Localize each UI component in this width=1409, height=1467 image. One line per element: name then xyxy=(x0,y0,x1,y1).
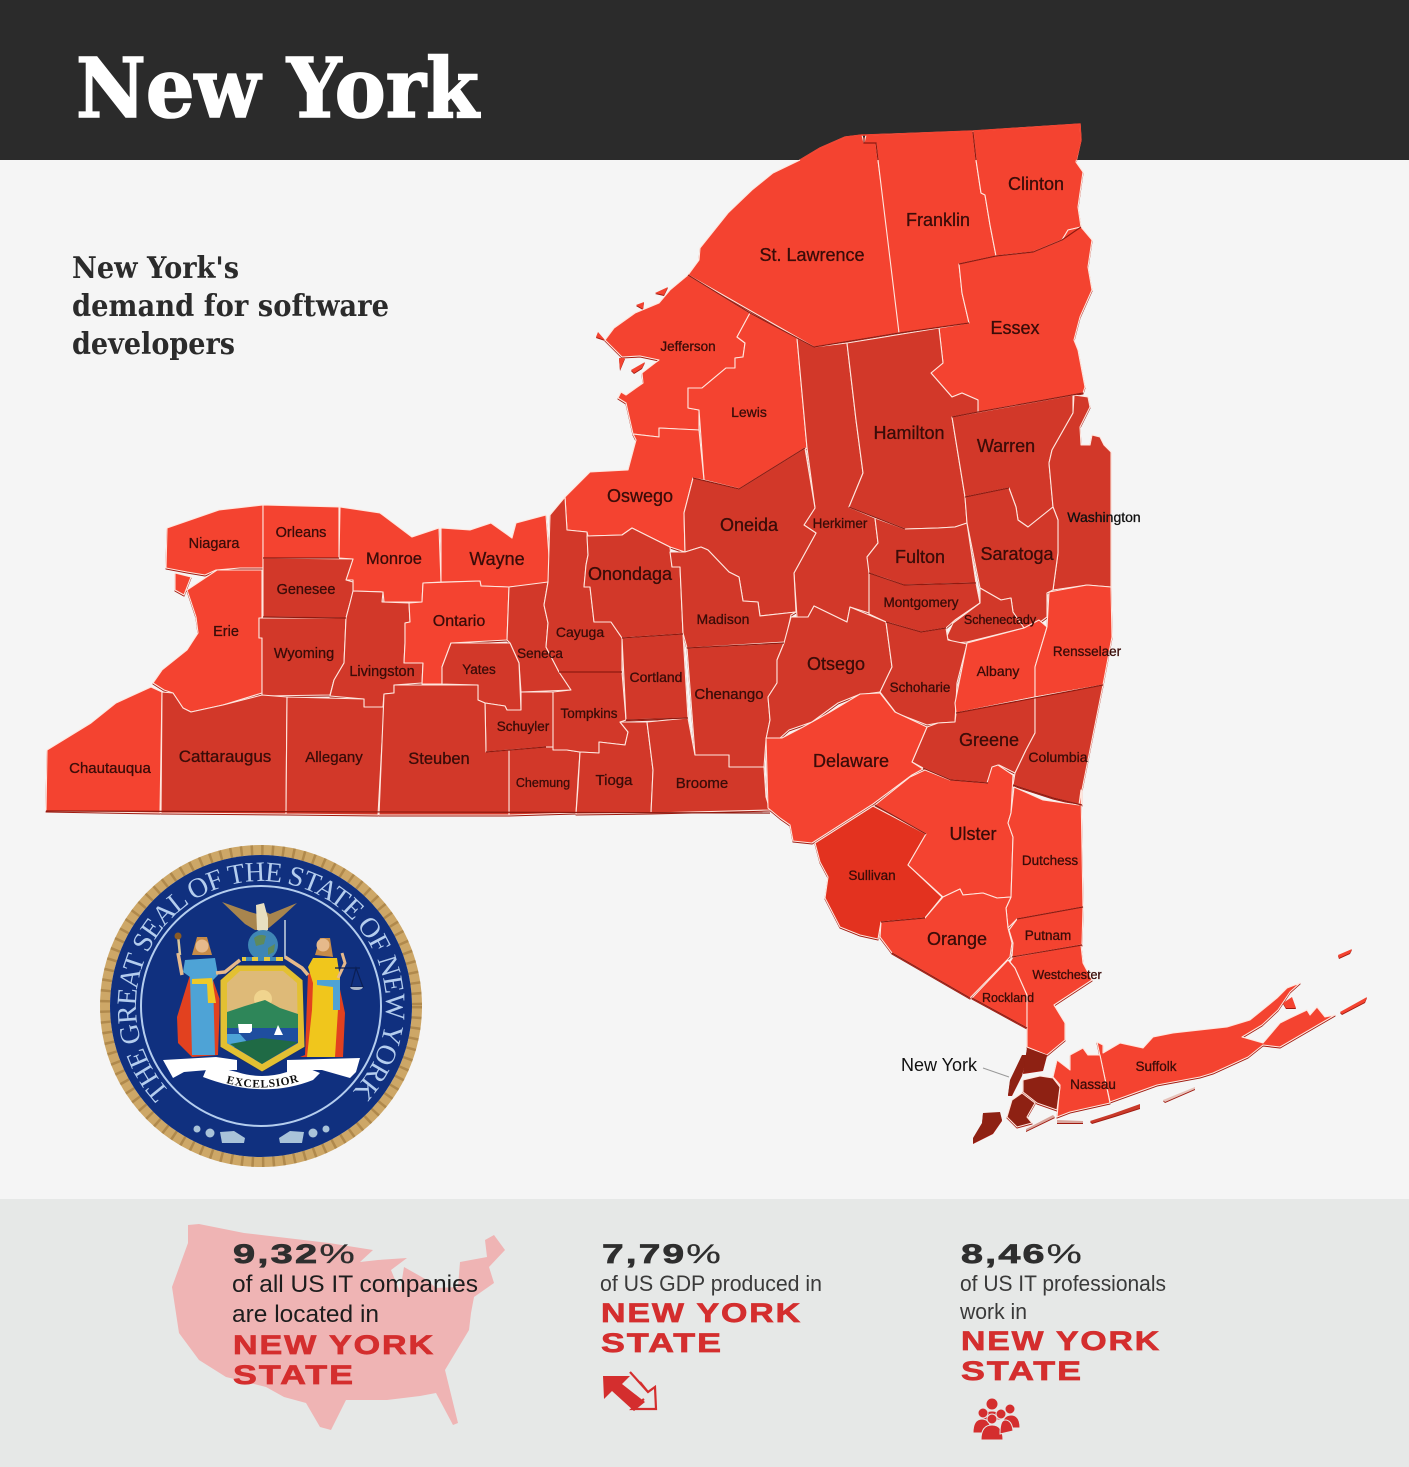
county: Washington xyxy=(1049,395,1111,590)
county: Chemung xyxy=(509,747,580,815)
county labels: Wayne xyxy=(469,549,525,569)
stat 2: text: 7,79 % xyxy=(602,1239,723,1269)
county: Livingston xyxy=(330,591,423,707)
county labels: Hamilton xyxy=(873,423,945,443)
footer band xyxy=(0,1199,1409,1467)
county: Bronx xyxy=(1023,1048,1047,1073)
county: Seneca xyxy=(507,582,571,692)
seal eagle xyxy=(222,902,297,932)
county labels: Otsego xyxy=(807,654,865,674)
county: Onondaga xyxy=(584,528,683,638)
county: Tioga xyxy=(576,722,653,814)
county labels: Seneca xyxy=(517,646,563,661)
county labels: Oswego xyxy=(607,486,673,506)
county: Albany xyxy=(955,620,1047,713)
county: Niagara xyxy=(166,505,263,575)
header band xyxy=(0,0,1409,160)
county labels: Chautauqua xyxy=(69,760,152,777)
county labels: Rockland xyxy=(982,991,1034,1005)
seal shield xyxy=(220,965,305,1072)
county labels: Ulster xyxy=(949,824,997,844)
county labels: Fulton xyxy=(895,547,945,567)
county labels: Erie xyxy=(213,624,239,640)
county: Dutchess xyxy=(1006,787,1083,928)
stat 2: text: STATE xyxy=(601,1328,723,1358)
county labels: Greene xyxy=(959,730,1019,750)
county: Erie xyxy=(153,570,262,712)
stat 1: text: are located in xyxy=(232,1301,379,1328)
county: Essex xyxy=(931,227,1092,412)
county: Putnam xyxy=(1009,907,1083,957)
title: New York xyxy=(76,41,481,137)
icon: two-way arrows xyxy=(603,1372,656,1411)
county: Wyoming xyxy=(259,618,346,696)
county labels: Herkimer xyxy=(813,516,868,531)
county labels: Schenectady xyxy=(964,613,1037,627)
county: Ontario xyxy=(404,581,509,684)
stat 1: US map silhouette xyxy=(172,1224,505,1430)
county: Herkimer xyxy=(794,338,878,622)
county labels: Schuyler xyxy=(497,719,550,734)
seal figure: Justice xyxy=(285,938,363,1057)
icon: group of people xyxy=(973,1398,1020,1440)
county: Cayuga xyxy=(544,497,622,673)
county: Madison xyxy=(670,547,796,648)
stat 1: text: NEW YORK xyxy=(233,1330,435,1360)
county: Warren xyxy=(952,395,1073,527)
county: Queens xyxy=(1023,1076,1060,1110)
seal blue disc xyxy=(110,855,412,1157)
county labels: Broome xyxy=(676,775,728,792)
county labels: Delaware xyxy=(813,751,889,771)
county labels: Steuben xyxy=(408,750,470,768)
stat 3: text: work in xyxy=(959,1299,1027,1324)
county labels: Jefferson xyxy=(660,339,716,354)
county labels: Ontario xyxy=(433,613,485,630)
county labels: Montgomery xyxy=(883,595,959,610)
county labels: Tompkins xyxy=(560,706,618,721)
county labels xyxy=(69,174,1177,1092)
stat 3: text: NEW YORK xyxy=(961,1326,1161,1356)
county labels: Dutchess xyxy=(1022,853,1078,868)
county labels: Genesee xyxy=(277,582,335,598)
county labels: Franklin xyxy=(906,210,970,230)
stat 1: text: STATE xyxy=(233,1360,355,1390)
county: Oneida xyxy=(684,448,816,616)
county labels: Columbia xyxy=(1028,749,1088,765)
county: Staten Island xyxy=(973,1112,1002,1143)
county: Grand Island xyxy=(175,573,191,595)
county: Otsego xyxy=(766,606,892,739)
county labels: Westchester xyxy=(1032,968,1102,982)
county labels: Cattaraugus xyxy=(179,747,271,766)
stat 1: text: 9,32 % xyxy=(233,1239,357,1269)
New York City callout xyxy=(901,1055,1009,1077)
county: Franklin xyxy=(864,131,996,333)
county: Greene xyxy=(912,697,1035,783)
county: Broome xyxy=(647,718,770,813)
county labels: Onondaga xyxy=(588,564,673,584)
county labels: Allegany xyxy=(305,749,363,766)
county labels: Washington xyxy=(1067,509,1141,525)
county: Columbia xyxy=(1013,685,1103,805)
county labels: Lewis xyxy=(731,404,767,420)
county labels: Nassau xyxy=(1070,1077,1116,1092)
county: Steuben xyxy=(379,685,509,815)
county: Wayne xyxy=(441,515,550,587)
Long Island east tip and barrier islands xyxy=(596,287,1367,1131)
county labels: Livingston xyxy=(349,664,415,680)
county labels: Orleans xyxy=(276,525,326,541)
county: Ulster xyxy=(875,765,1013,898)
county: Monroe xyxy=(339,507,441,602)
county: Fulton xyxy=(867,518,976,585)
county labels: Cortland xyxy=(630,669,682,685)
stat 3: text: STATE xyxy=(961,1356,1083,1386)
subheading: New York's xyxy=(72,251,239,286)
county labels: St. Lawrence xyxy=(759,245,865,265)
county labels: Suffolk xyxy=(1135,1059,1177,1074)
subheading: demand for software xyxy=(72,289,389,324)
county labels: Tioga xyxy=(596,772,633,789)
county: Rensselaer xyxy=(1035,585,1112,697)
county: Lewis xyxy=(688,313,807,489)
county: Manhattan xyxy=(1008,1055,1027,1095)
county: Nassau xyxy=(1053,1048,1110,1117)
county: Clinton xyxy=(973,124,1083,256)
county: Delaware xyxy=(766,693,927,843)
county labels: Madison xyxy=(697,611,749,627)
county labels: Sullivan xyxy=(848,868,896,883)
seal figure: Liberty xyxy=(174,932,240,1057)
stat 1: text xyxy=(232,1239,478,1390)
county: Cattaraugus xyxy=(161,692,287,814)
county: Montgomery xyxy=(869,573,980,632)
county: Brooklyn xyxy=(1007,1093,1035,1127)
stat 2: text: NEW YORK xyxy=(601,1298,802,1328)
map of New York counties xyxy=(46,124,1367,1143)
county: Oswego xyxy=(565,428,704,552)
county: Orange xyxy=(880,889,1012,998)
county: Tompkins xyxy=(553,672,628,753)
county: Chenango xyxy=(687,643,784,767)
stat 3: text xyxy=(959,1239,1166,1386)
county: Allegany xyxy=(286,697,384,815)
county labels: Clinton xyxy=(1008,174,1064,194)
dark county boundary lines xyxy=(46,227,1103,1028)
seal globe xyxy=(242,920,285,961)
county labels: Putnam xyxy=(1025,928,1071,943)
county: Cortland xyxy=(622,634,688,720)
county: Jefferson xyxy=(605,275,750,437)
stat 2: text xyxy=(600,1239,822,1358)
county: Schenectady xyxy=(946,588,1024,643)
county labels: Schoharie xyxy=(890,680,950,695)
subheading xyxy=(72,251,389,362)
county labels: Rensselaer xyxy=(1053,644,1122,659)
seal motto: EXCELSIOR xyxy=(226,1075,299,1088)
county: Sullivan xyxy=(815,806,942,939)
stat 3: text: of US IT professionals xyxy=(960,1271,1166,1296)
stat 1: text: of all US IT companies xyxy=(232,1271,478,1298)
county: Westchester xyxy=(1010,945,1092,1055)
county labels: Oneida xyxy=(720,515,779,535)
county: Rockland xyxy=(972,960,1027,1028)
county: Saratoga xyxy=(965,488,1058,628)
county labels: Niagara xyxy=(189,536,240,552)
county: St. Lawrence xyxy=(688,135,899,347)
county labels: Orange xyxy=(927,929,987,949)
county: Hamilton xyxy=(847,328,978,529)
subheading: developers xyxy=(72,327,235,362)
seal ring text: THE GREAT SEAL OF THE STATE OF NEW YORK xyxy=(118,862,404,1104)
county labels: Albany xyxy=(977,663,1019,679)
county labels: Chemung xyxy=(516,776,570,790)
county: Suffolk xyxy=(1097,983,1335,1102)
county: Schoharie xyxy=(880,622,967,725)
county: Orleans xyxy=(263,505,339,558)
county: Chautauqua xyxy=(46,687,162,813)
county labels: Chenango xyxy=(694,686,764,703)
seal bottom shells xyxy=(194,1126,330,1143)
seal rope ring xyxy=(105,850,417,1162)
north edge over header xyxy=(800,124,1081,160)
county labels: Monroe xyxy=(366,550,422,568)
county labels: Yates xyxy=(462,662,496,677)
state seal xyxy=(100,845,422,1167)
stat 3: text: 8,46 % xyxy=(961,1239,1084,1269)
stat 2: text: of US GDP produced in xyxy=(600,1271,822,1296)
county labels: Warren xyxy=(977,436,1035,456)
county: Yates xyxy=(442,643,521,710)
New York City callout: New York xyxy=(901,1055,978,1075)
county: Schuyler xyxy=(485,692,554,752)
county labels: Wyoming xyxy=(274,646,334,662)
county labels: Essex xyxy=(990,318,1040,338)
county labels: Saratoga xyxy=(980,544,1055,564)
county: Genesee xyxy=(263,558,353,618)
seal banner xyxy=(163,1057,360,1089)
county labels: Cayuga xyxy=(556,624,604,640)
